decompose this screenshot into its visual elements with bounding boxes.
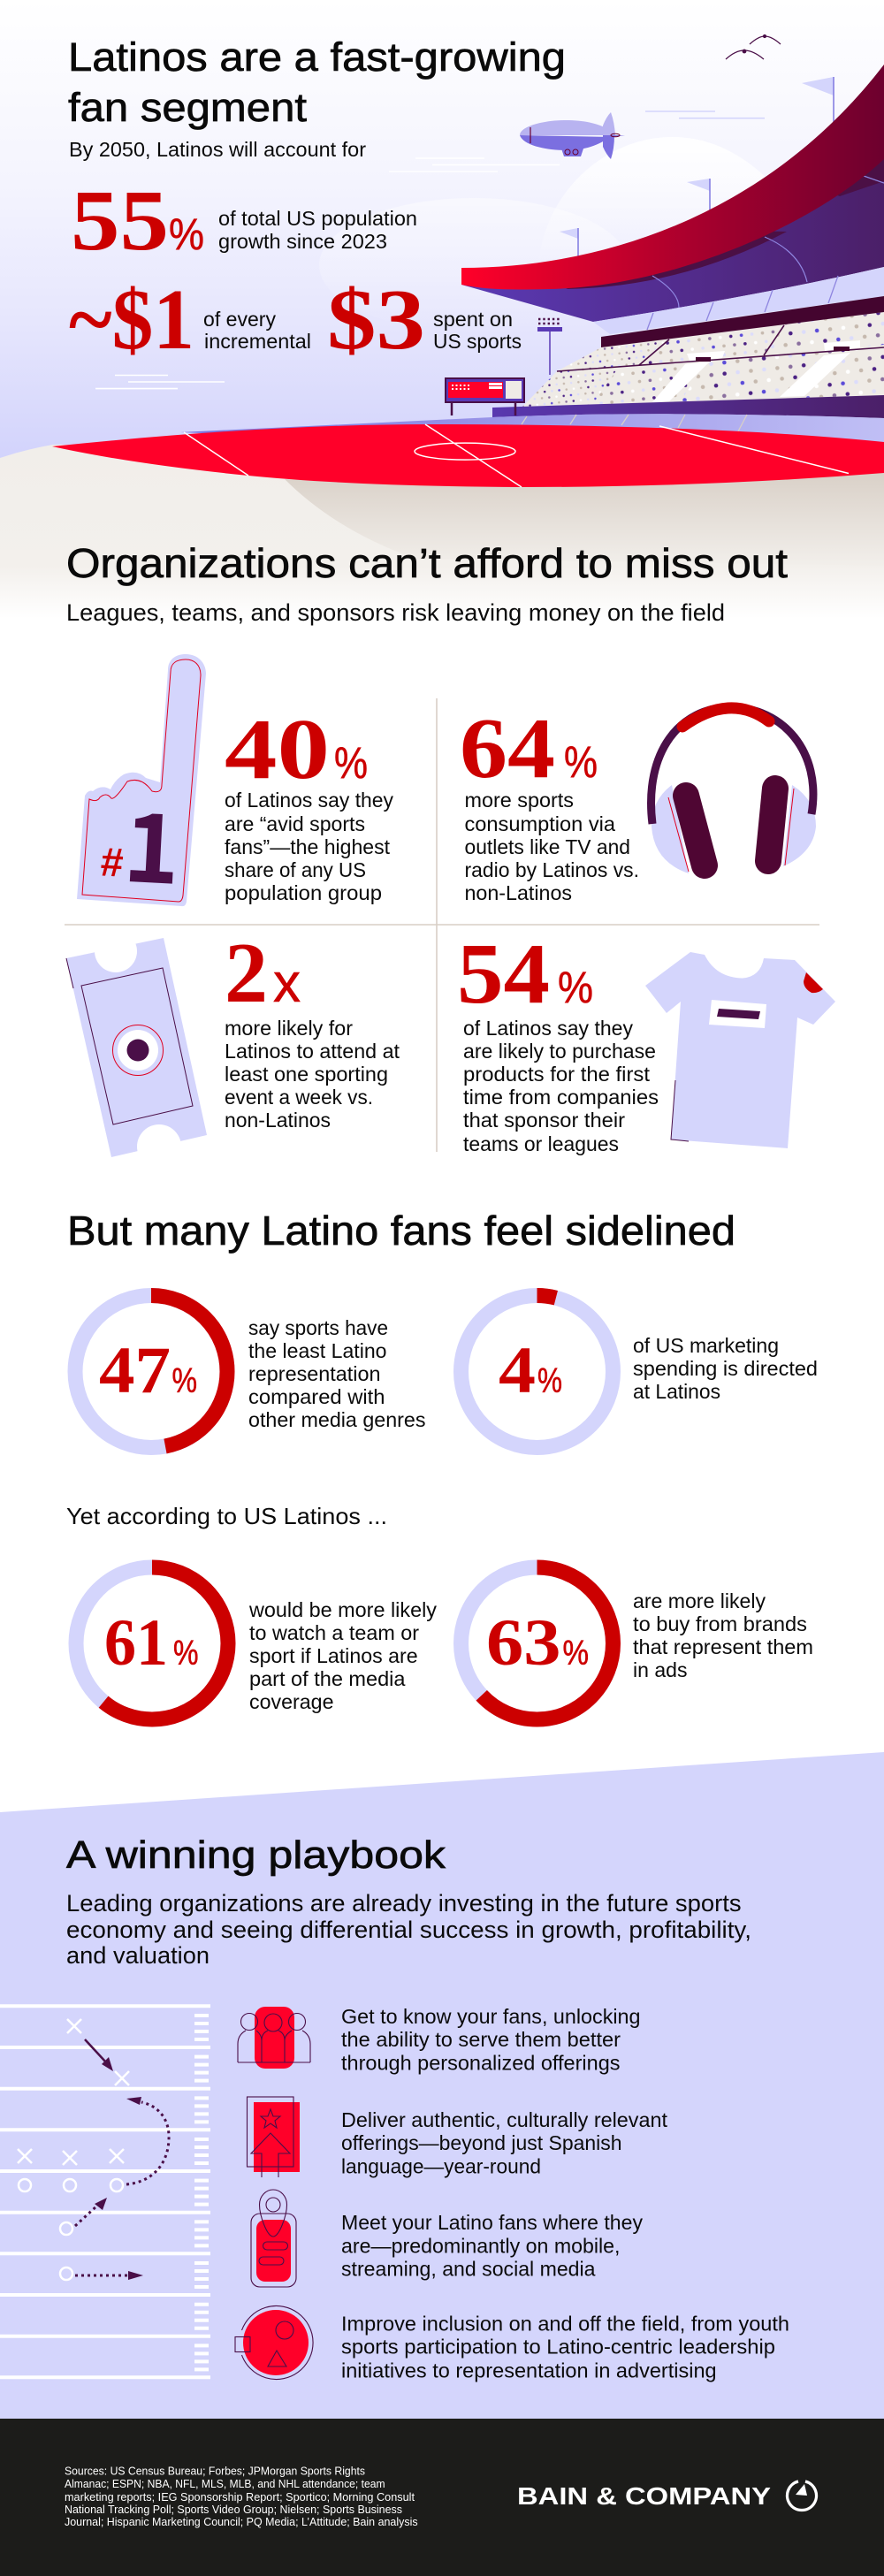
text: 63%: to buy from brands	[633, 1612, 807, 1635]
stat: 64%: more sports	[465, 789, 574, 812]
subtitle: By 2050, Latinos will account for	[69, 138, 366, 161]
text: 61%: to watch a team or	[249, 1621, 419, 1644]
text: 47%: the least Latino	[248, 1339, 387, 1362]
stat: 2x: more likely for	[225, 1017, 353, 1040]
stat: 2x: x	[273, 953, 301, 1014]
subheading: organizations: Leagues, teams, and sponsors risk leaving money on the field	[66, 599, 725, 626]
text: sources: Journal; Hispanic Marketing Council; PQ Media; L’Attitude; Bain analysis	[65, 2515, 418, 2528]
stat: 40%	[225, 702, 393, 904]
deck arcs	[652, 176, 884, 308]
donut: 47%: %	[171, 1362, 197, 1400]
text: 61%: would be more likely	[248, 1598, 438, 1621]
stat: 55%: 55	[71, 173, 169, 269]
icon: t-shirt	[645, 952, 835, 1148]
stat: 54%: products for the first	[463, 1063, 651, 1086]
title	[68, 34, 566, 130]
icon: fans	[238, 2007, 310, 2069]
flags	[560, 77, 834, 261]
text: sources	[65, 2465, 418, 2528]
stat: 54%: %	[558, 963, 593, 1012]
text: 61%: sport if Latinos are	[249, 1644, 418, 1667]
text: item 4: initiatives to representation in advertising	[341, 2359, 717, 2382]
text: item 1	[341, 2005, 640, 2074]
donut: 4%: %	[537, 1362, 562, 1400]
text: item 2: offerings—beyond just Spanish	[341, 2131, 622, 2154]
text: 4%: spending is directed	[633, 1357, 818, 1380]
text: 63%	[633, 1589, 813, 1681]
donut: 4%: 4	[499, 1334, 536, 1407]
cloud: small	[319, 198, 629, 332]
text: 61%: coverage	[249, 1690, 334, 1713]
stat: 54%: 54	[457, 926, 550, 1022]
panel: footer	[0, 2419, 884, 2576]
intro text: playbook: economy and seeing differential success in growth, profitability,	[66, 1917, 751, 1943]
icon: banner with star and arrow	[248, 2097, 300, 2177]
icon: headphones	[652, 707, 816, 873]
stat: 64%: outlets like TV and	[465, 835, 630, 858]
stat: 2x	[225, 926, 400, 1132]
text: item 4	[341, 2313, 789, 2382]
title: fan segment	[68, 85, 308, 130]
donut: 61%: %	[173, 1635, 198, 1673]
stat: 2x: non-Latinos	[225, 1109, 331, 1132]
text: sources: Sources: US Census Bureau; Forbes; JPMorgan Sports Rights	[65, 2465, 365, 2477]
stat: 55%	[71, 173, 417, 269]
heading: playbook: A winning playbook	[66, 1833, 446, 1877]
donut: 47%	[75, 1296, 227, 1448]
text: 4%: of US marketing	[633, 1334, 779, 1357]
stat: 54%: that sponsor their	[463, 1109, 625, 1132]
icon: ticket	[66, 930, 207, 1169]
text: item 3: Meet your Latino fans where they	[341, 2211, 643, 2234]
stat: 54%	[457, 926, 659, 1155]
text: item 4: sports participation to Latino-centric leadership	[341, 2336, 775, 2359]
text: sources: marketing reports; IEG Sponsorship Report; Sportico; Morning Consult	[65, 2490, 415, 2504]
text: item 4: Improve inclusion on and off the field, from youth	[341, 2313, 789, 2336]
text: 47%: representation	[248, 1362, 380, 1385]
text: 4%: at Latinos	[633, 1380, 720, 1403]
stat: 2x: event a week vs.	[225, 1086, 373, 1109]
stand spectators	[522, 312, 884, 408]
stat: 64%: consumption via	[465, 812, 615, 835]
stat: $3: $3	[327, 272, 425, 368]
stat: 64%: non-Latinos	[465, 881, 572, 904]
text: item 1: through personalized offerings	[341, 2051, 621, 2074]
stat: $3: US sports	[433, 330, 522, 353]
text: 4%	[633, 1334, 818, 1403]
stat: 64%: 64	[460, 701, 555, 796]
heading: sidelined: But many Latino fans feel sidelined	[67, 1208, 735, 1254]
text: 61%	[248, 1598, 438, 1713]
field	[52, 424, 884, 487]
subheading: according to US Latinos: Yet according to US Latinos ...	[66, 1503, 387, 1529]
icon: foam finger: 1	[120, 772, 184, 912]
section: hero illustration	[0, 0, 884, 619]
upper dark beam	[601, 296, 884, 347]
stat: 64%	[460, 701, 639, 904]
text: 47%: other media genres	[248, 1408, 426, 1431]
icon: birds	[726, 35, 781, 59]
stat: 2x: Latinos to attend at	[225, 1040, 400, 1063]
stat: 55%: of total US population	[218, 207, 417, 230]
stand cream base	[522, 312, 884, 408]
text: item 3: streaming, and social media	[341, 2258, 596, 2281]
field lines	[184, 424, 849, 487]
text: 63%: are more likely	[633, 1589, 766, 1612]
roof shadow wedges	[566, 150, 884, 289]
text: item 3: are—predominantly on mobile,	[341, 2235, 621, 2258]
donut: 63%: %	[562, 1635, 589, 1673]
text: item 2: Deliver authentic, culturally relevant	[341, 2108, 668, 2131]
scoreboard	[446, 378, 524, 415]
donut: 63%: 63	[486, 1606, 560, 1680]
stat: 64%: radio by Latinos vs.	[465, 858, 639, 881]
stat: 2x: 2	[225, 926, 268, 1021]
lower purple band	[492, 395, 884, 418]
sky background	[0, 0, 884, 460]
rail boxes	[696, 347, 850, 362]
stat: 40%: fans”—the highest	[225, 835, 391, 858]
icon: blimp	[520, 112, 625, 159]
stat: $3	[327, 272, 522, 368]
icon: foam finger: #	[100, 838, 125, 886]
stat: 54%: teams or leagues	[463, 1132, 619, 1155]
stat: 54%: time from companies	[463, 1086, 659, 1109]
text: 63%: in ads	[633, 1658, 688, 1681]
stat: 64%: %	[564, 737, 598, 787]
intro text: playbook: Leading organizations are already investing in the future sports	[66, 1890, 742, 1917]
intro text: playbook: and valuation	[66, 1942, 210, 1969]
icon: inclusion circle	[235, 2305, 313, 2379]
logo: Bain & Company	[517, 2481, 817, 2511]
track band	[180, 414, 884, 451]
logo: Bain & Company: BAIN & COMPANY	[517, 2482, 771, 2510]
stat: ~$1	[69, 272, 311, 368]
stat: 55%: %	[169, 210, 204, 259]
stand white stripes	[652, 340, 860, 402]
stat: 40%: are “avid sports	[225, 812, 365, 835]
concourse gap	[593, 267, 884, 334]
stat: ~$1: incremental	[204, 330, 311, 353]
cloud streak lines	[645, 111, 765, 118]
heading: organizations: Organizations can’t afford to miss out	[66, 540, 788, 586]
text: item 3	[341, 2211, 643, 2281]
stand rail	[557, 325, 884, 371]
donut: 61%	[76, 1567, 228, 1719]
text: item 1: the ability to serve them better	[341, 2028, 621, 2051]
text: sources: Almanac; ESPN; NBA, NFL, MLS, MLB, and NHL attendance; team	[65, 2477, 385, 2490]
sand ground	[0, 442, 884, 619]
icon: foam finger	[77, 654, 206, 912]
stat: 40%: population group	[225, 881, 382, 904]
text: sources: National Tracking Poll; Sports Video Group; Nielsen; Sports Business	[65, 2503, 402, 2516]
cloud: large	[539, 137, 782, 265]
text: 47%: say sports have	[248, 1316, 388, 1339]
text: 47%	[248, 1316, 426, 1431]
panel: playbook background	[0, 1752, 884, 2419]
stat: 40%: %	[334, 738, 368, 788]
stadium upper deck underside	[461, 159, 884, 322]
chart: football play diagram	[0, 2006, 210, 2377]
donut: 63%	[461, 1567, 613, 1719]
darker sand	[285, 469, 884, 566]
stat: 55%: growth since 2023	[218, 230, 387, 253]
stat: 40%: 40	[225, 702, 330, 797]
grid dividers	[65, 698, 819, 1152]
stat: ~$1: of every	[203, 308, 276, 331]
stat: $3: spent on	[433, 308, 513, 331]
icon: phone with pin	[251, 2190, 296, 2287]
track ticks	[522, 415, 747, 431]
text: item 1: Get to know your fans, unlocking	[341, 2005, 640, 2028]
text: item 2	[341, 2108, 668, 2178]
white streak lines	[95, 158, 560, 389]
stadium roof	[461, 65, 884, 289]
text: item 2: language—year-round	[341, 2155, 541, 2178]
title: Latinos are a fast-growing	[68, 34, 566, 80]
light tower	[537, 319, 562, 375]
stat: 40%: of Latinos say they	[225, 789, 393, 812]
stat: 2x: least one sporting	[225, 1063, 388, 1086]
stat: 54%: of Latinos say they	[463, 1017, 633, 1040]
intro text: playbook	[66, 1890, 751, 1969]
donut: 4%	[461, 1296, 613, 1448]
text: 61%: part of the media	[249, 1667, 406, 1690]
text: 47%: compared with	[248, 1385, 385, 1408]
text: 63%: that represent them	[633, 1635, 813, 1658]
columns	[647, 276, 838, 330]
stat: 54%: are likely to purchase	[463, 1040, 656, 1063]
donut: 47%: 47	[99, 1334, 171, 1407]
donut: 61%: 61	[104, 1606, 168, 1680]
stat: 40%: share of any US	[225, 858, 366, 881]
stat: ~$1: ~$1	[69, 272, 194, 368]
